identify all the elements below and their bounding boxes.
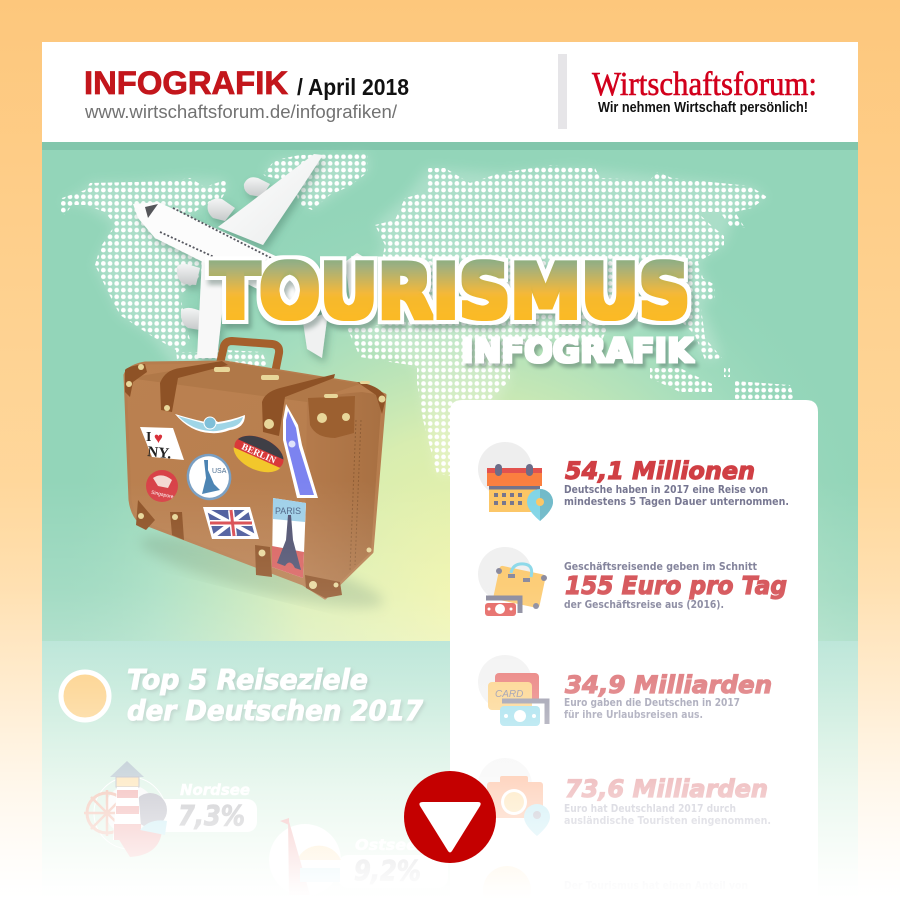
stat heading: 34,9 Milliarden [565, 671, 772, 699]
section icon: yellow circle [61, 672, 109, 720]
plane cockpit window [145, 204, 158, 218]
plane fuselage [133, 202, 345, 315]
icon: card and money [478, 655, 547, 726]
sticker: I love NY: I [146, 430, 151, 445]
label: Ostsee [355, 836, 417, 854]
value: 7,3% [178, 799, 245, 832]
sticker: USA: USA [212, 468, 227, 475]
illustration: suitcase [125, 341, 388, 622]
sticker: Paris: PARIS [275, 506, 301, 516]
stat description [564, 697, 740, 721]
logo: Wirtschaftsforum: Wir nehmen Wirtschaft persönlich! [598, 99, 808, 116]
icon: faint coins [483, 866, 531, 900]
stat heading: 73,6 Milliarden [565, 775, 768, 803]
button: scroll down [404, 771, 496, 863]
stat intro: Geschäftsreisende geben im Schnitt [564, 561, 757, 573]
stat description: mindestens 5 Tagen Dauer unternommen. [564, 496, 789, 508]
icon: camera and pin [478, 758, 550, 836]
pill [338, 855, 448, 888]
icon: calendar and pin [478, 442, 553, 521]
pill [150, 799, 257, 832]
suitcase side face [304, 392, 382, 597]
heading: INFOGRAFIK: INFOGRAFIK [84, 65, 288, 101]
stat: 73,6 Milliarden [478, 758, 771, 836]
stat description [564, 803, 771, 827]
stat description: Deutsche haben in 2017 eine Reise von [564, 484, 768, 496]
sticker: Singapore: Singapore [150, 490, 174, 500]
sticker: UK stamp [203, 507, 259, 539]
sticker: I love NY: ♥ [154, 430, 163, 447]
heading: Top 5 Reiseziele [127, 663, 423, 727]
panel: statistics card [450, 400, 818, 900]
plane lower wing [197, 258, 245, 358]
heading: Top 5 Reiseziele: der Deutschen 2017 [127, 694, 423, 727]
stat: 34,9 Milliarden [478, 655, 772, 726]
sticker: Berlin: BERLIN [240, 442, 277, 466]
stat description: ausländische Touristen eingenommen. [564, 815, 771, 827]
sticker: wings [175, 414, 245, 433]
icon: lighthouse and ship wheel [84, 761, 167, 857]
stat description: Euro gaben die Deutschen in 2017 [564, 697, 740, 709]
stat heading: 155 Euro pro Tag [565, 571, 787, 600]
dotted world map [61, 152, 793, 476]
suitcase handle [219, 341, 279, 373]
sticker: I love NY: NY. [147, 444, 172, 463]
suitcase body [125, 362, 385, 598]
destination: Nordsee [84, 761, 257, 857]
heading: Top 5 Reiseziele: Top 5 Reiseziele [127, 663, 368, 696]
white fade overlay [0, 480, 900, 900]
sticker: Big Ben [283, 404, 318, 498]
icon: sailboat [269, 818, 341, 896]
value: 9,2% [354, 854, 421, 887]
suitcase rivets [126, 364, 386, 589]
date: / April 2018 [297, 74, 409, 100]
sticker: USA [182, 450, 236, 504]
sticker: Paris [272, 498, 306, 578]
url: www.wirtschaftsforum.de/infografiken/ [84, 102, 397, 122]
stat description: Euro hat Deutschland 2017 durch [564, 803, 736, 815]
destination: Ostsee [269, 818, 448, 896]
stat: tourism share [483, 866, 748, 900]
suitcase corner guard [308, 396, 355, 438]
sticker: Singapore [146, 470, 178, 502]
plane upper wing [218, 154, 323, 245]
illustration: airplane [133, 154, 372, 358]
plane engines [177, 177, 270, 330]
icon: suitcase and money [478, 547, 547, 616]
stat description: Der Tourismus hat einen Anteil von [564, 880, 748, 892]
panel: header [42, 42, 858, 142]
stat: 155 Euro pro Tag [478, 547, 787, 616]
sticker: Berlin [228, 429, 289, 479]
subtitle: INFOGRAFIK: INFOGRAFIK [461, 331, 694, 370]
panel: lower section background [42, 641, 858, 900]
plane windows [173, 208, 275, 260]
stat: 54,1 Millionen [478, 442, 789, 521]
stat description [564, 484, 789, 508]
stat description: der Geschäftsreise aus (2016). [564, 599, 724, 611]
stat description: für ihre Urlaubsreisen aus. [564, 709, 703, 721]
sticker: I love NY [140, 427, 184, 463]
title: TOURISMUS: TOURISMUS [211, 248, 690, 336]
suitcase straps [125, 361, 386, 598]
plane tail [303, 312, 328, 358]
divider [558, 54, 567, 129]
stat heading: 54,1 Millionen [565, 457, 755, 485]
icon: card and money: CARD [495, 689, 523, 700]
panel: hero background [42, 142, 858, 641]
label: Nordsee [180, 781, 250, 799]
logo: Wirtschaftsforum [592, 66, 817, 116]
logo: Wirtschaftsforum: Wirtschaftsforum: [592, 66, 817, 103]
